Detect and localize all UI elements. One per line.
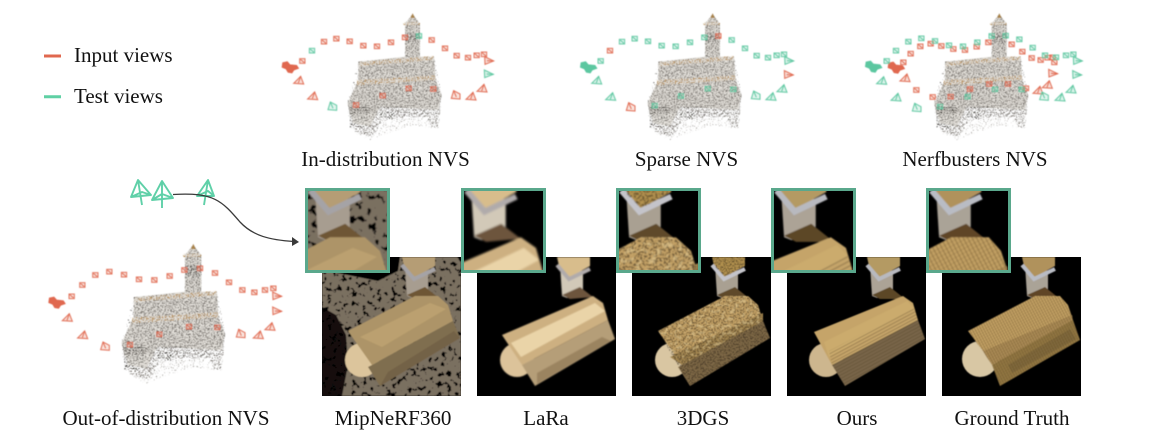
render: MipNeRF360 [322,257,461,396]
inset: Ground Truth zoom [841,178,1019,373]
label: Ours: Ours [837,406,877,430]
label: 3DGS: 3DGS [677,406,729,430]
panel: out-of-distribution point cloud [49,244,282,383]
label: Nerfbusters NVS: Nerfbusters NVS [902,147,1048,171]
label: in-distribution NVS: In-distribution NVS [301,147,470,171]
icon: large test cameras [131,180,214,208]
panel: sparse point cloud [580,13,794,140]
render: Ground Truth [942,257,1081,396]
label: LaRa: LaRa [523,406,569,430]
inset: LaRa zoom [381,178,554,373]
label: MipNeRF360: MipNeRF360 [335,406,451,430]
icon: test camera 2 [152,181,173,208]
legend [44,43,173,108]
render: LaRa [477,257,616,396]
panel: in-distribution point cloud [282,13,494,140]
inset: 3DGS zoom [536,178,709,373]
icon: test camera 1 [131,180,151,205]
legend: test views: Test views [74,84,163,108]
icon: test camera 3 [197,180,214,205]
label: sparse NVS: Sparse NVS [635,147,738,171]
render: 3DGS [632,257,771,396]
panel: nerfbusters point cloud [865,13,1082,140]
render: Ours [787,257,926,396]
label: out-of-distribution NVS: Out-of-distribution NVS [62,406,270,430]
label: Ground Truth: Ground Truth [955,406,1070,430]
legend: input views: Input views [74,43,173,67]
inset: MipNeRF360 zoom [190,178,400,388]
inset: Ours zoom [689,178,864,373]
arrow: test view to renders [173,194,299,246]
